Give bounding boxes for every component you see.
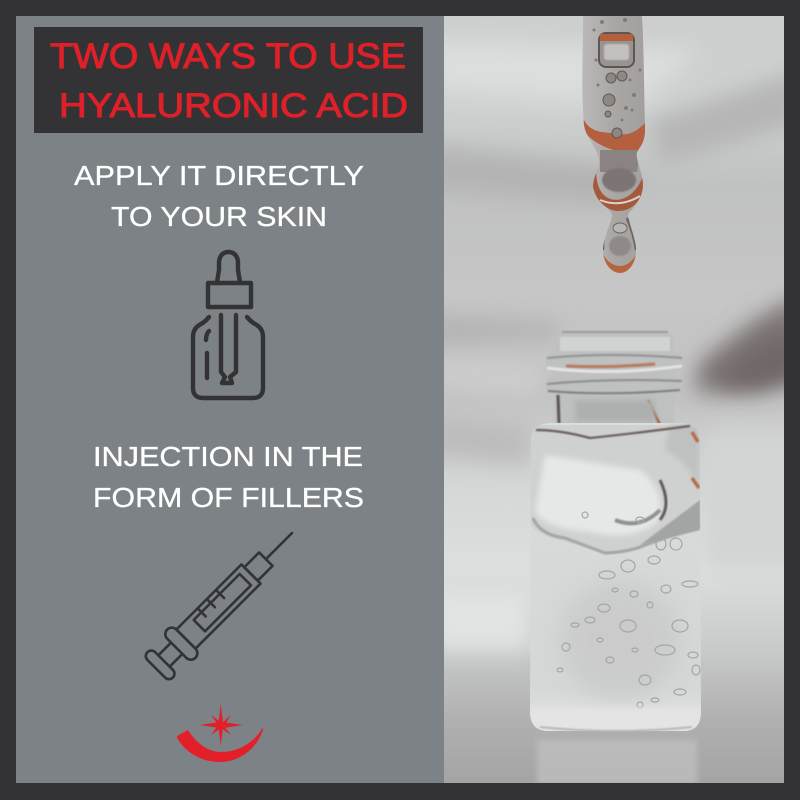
icon: syringe — [142, 519, 306, 683]
heading: apply directly: APPLY IT DIRECTLY — [74, 160, 364, 191]
photo background — [430, 16, 800, 783]
icon: dropper bottle — [193, 252, 263, 398]
title banner — [34, 27, 423, 133]
heading: injection: FORM OF FILLERS — [93, 482, 364, 513]
bubbles — [557, 512, 700, 708]
reflection — [537, 740, 697, 784]
title banner: HYALURONIC ACID — [59, 87, 408, 125]
title banner: TWO WAYS TO USE — [50, 37, 406, 76]
heading: apply directly: TO YOUR SKIN — [111, 201, 327, 232]
heading: injection: INJECTION IN THE — [93, 441, 363, 472]
bottle neck and threads — [546, 331, 683, 425]
logo: red crescent and star — [176, 704, 263, 762]
heading: injection — [93, 441, 364, 513]
panel: left grey — [16, 16, 444, 783]
dropper — [582, 16, 645, 273]
photo: dropper above glass bottle — [430, 10, 800, 784]
bottle rim highlights — [536, 426, 690, 438]
bottle body — [525, 420, 705, 735]
glass bottle — [525, 331, 705, 784]
heading: apply directly — [74, 160, 364, 232]
